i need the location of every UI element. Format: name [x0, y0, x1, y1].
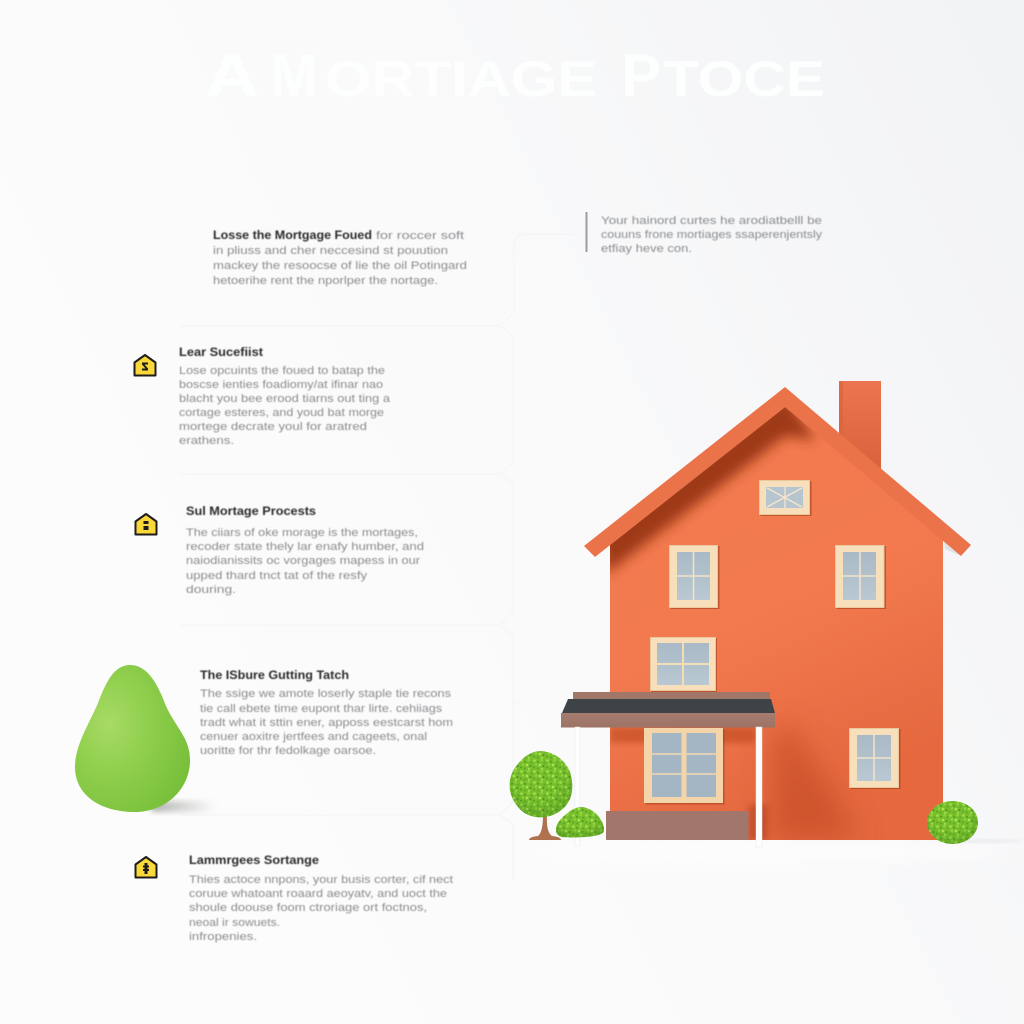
callout: top right note: Your hainord curtes he arodiatbelll be — [601, 215, 822, 227]
chimney — [839, 381, 881, 471]
text: step one: cortage esteres, and youd bat morge — [179, 407, 384, 419]
window: gable — [760, 480, 812, 516]
step: The Isbure Gutting Tatch — [200, 670, 453, 757]
window: middle — [650, 638, 717, 692]
house illustration — [510, 381, 1023, 861]
text: step one: erathens. — [179, 435, 234, 447]
text block: intro: hetoerihe rent the nporlper the nortage. — [213, 275, 438, 287]
icon: yellow house — [136, 514, 156, 534]
text: step four — [189, 855, 454, 943]
bush: left — [556, 807, 604, 837]
text: step two: recoder state thely lar enafy humber, and — [186, 541, 424, 553]
step: Lammrgees Sortange — [136, 855, 454, 943]
ground — [530, 843, 1010, 861]
icon: yellow house — [136, 857, 156, 878]
text: step one: Lear Sucefiist — [179, 347, 263, 359]
planter box — [606, 811, 748, 840]
green pear shape — [75, 665, 216, 812]
bush: right — [927, 801, 978, 844]
text: step two: douring. — [186, 584, 236, 596]
callout: top right note: couuns frone mortiages ssaperenjentsly — [601, 229, 822, 241]
text: step one: boscse ienties foadiomy/at ifinar nao — [179, 379, 383, 391]
text block: intro: in pliuss and cher neccesind st pouution — [213, 245, 448, 257]
callout: top right note: etfiay heve con. — [601, 243, 692, 255]
text: step one — [179, 347, 391, 447]
text: step two: upped thard tnct tat of the resfy — [186, 570, 367, 582]
icon: yellow house — [134, 355, 156, 376]
window: lower right — [850, 728, 900, 789]
text: step four: infropenies. — [189, 931, 257, 943]
step: Sul Mortage Procests — [136, 506, 424, 596]
text block: intro: mackey the resoocse of lie the oil Potingard — [213, 260, 467, 272]
porch roof — [561, 692, 775, 728]
title: TOCE — [663, 51, 825, 107]
step: The Isbure Gutting Tatch: The ISbure Gutting Tatch — [200, 670, 349, 682]
text block: intro: Losse the Mortgage Foued — [213, 230, 372, 242]
step: The Isbure Gutting Tatch: tie call ebete time eupont thar lirte. cehiiags — [200, 703, 442, 715]
text: step two — [186, 506, 424, 596]
text: step one: Lose opcuints the foued to batap the — [179, 365, 385, 377]
text: step two: naiodianissits oc vorgages mapess in our — [186, 555, 420, 567]
text: step four: coruue whatoant roaard aeoyatv, and uoct the — [189, 888, 447, 900]
step: The Isbure Gutting Tatch: uoritte for thr fedolkage oarsoe. — [200, 745, 376, 757]
text: step two: Sul Mortage Procests — [186, 506, 316, 518]
title: P — [621, 42, 661, 109]
step: The Isbure Gutting Tatch: cenuer aoxitre jertfees and cageets, onal — [200, 731, 427, 743]
window: upper right — [836, 546, 886, 609]
text: step four: Lammrgees Sortange — [189, 855, 319, 867]
step: The Isbure Gutting Tatch: The ssige we amote loserly staple tie recons — [200, 688, 451, 700]
text: step one: blacht you bee erood tiarns out ting a — [179, 393, 391, 405]
text block: intro — [213, 230, 467, 287]
text: step four: Thies actoce nnpons, your busis corter, cif nect — [189, 874, 454, 886]
right eave shadow — [943, 533, 961, 556]
connector lines — [180, 234, 575, 882]
title — [205, 42, 825, 109]
step: The Isbure Gutting Tatch: tradt what it sttin ener, apposs eestcarst hom — [200, 717, 453, 729]
text: step one: mortege decrate youl for aratred — [179, 421, 367, 433]
window: upper left — [670, 546, 720, 609]
text: step four: shoule doouse foom ctroriage ort foctnos, — [189, 902, 427, 914]
step: Lear Sucefiist — [134, 347, 391, 447]
title: A — [205, 42, 259, 109]
tree — [510, 751, 572, 840]
porch posts — [575, 727, 762, 847]
callout: top right note — [586, 212, 822, 255]
roof — [584, 387, 971, 557]
text block: intro: for roccer soft — [376, 230, 465, 242]
wall — [600, 395, 943, 840]
title: M — [270, 42, 318, 109]
text: step four: neoal ir sowuets. — [189, 917, 280, 929]
window: porch — [644, 728, 724, 804]
text: step two: The ciiars of oke morage is the mortages, — [186, 527, 418, 539]
title: ORTIAGE — [325, 51, 597, 107]
